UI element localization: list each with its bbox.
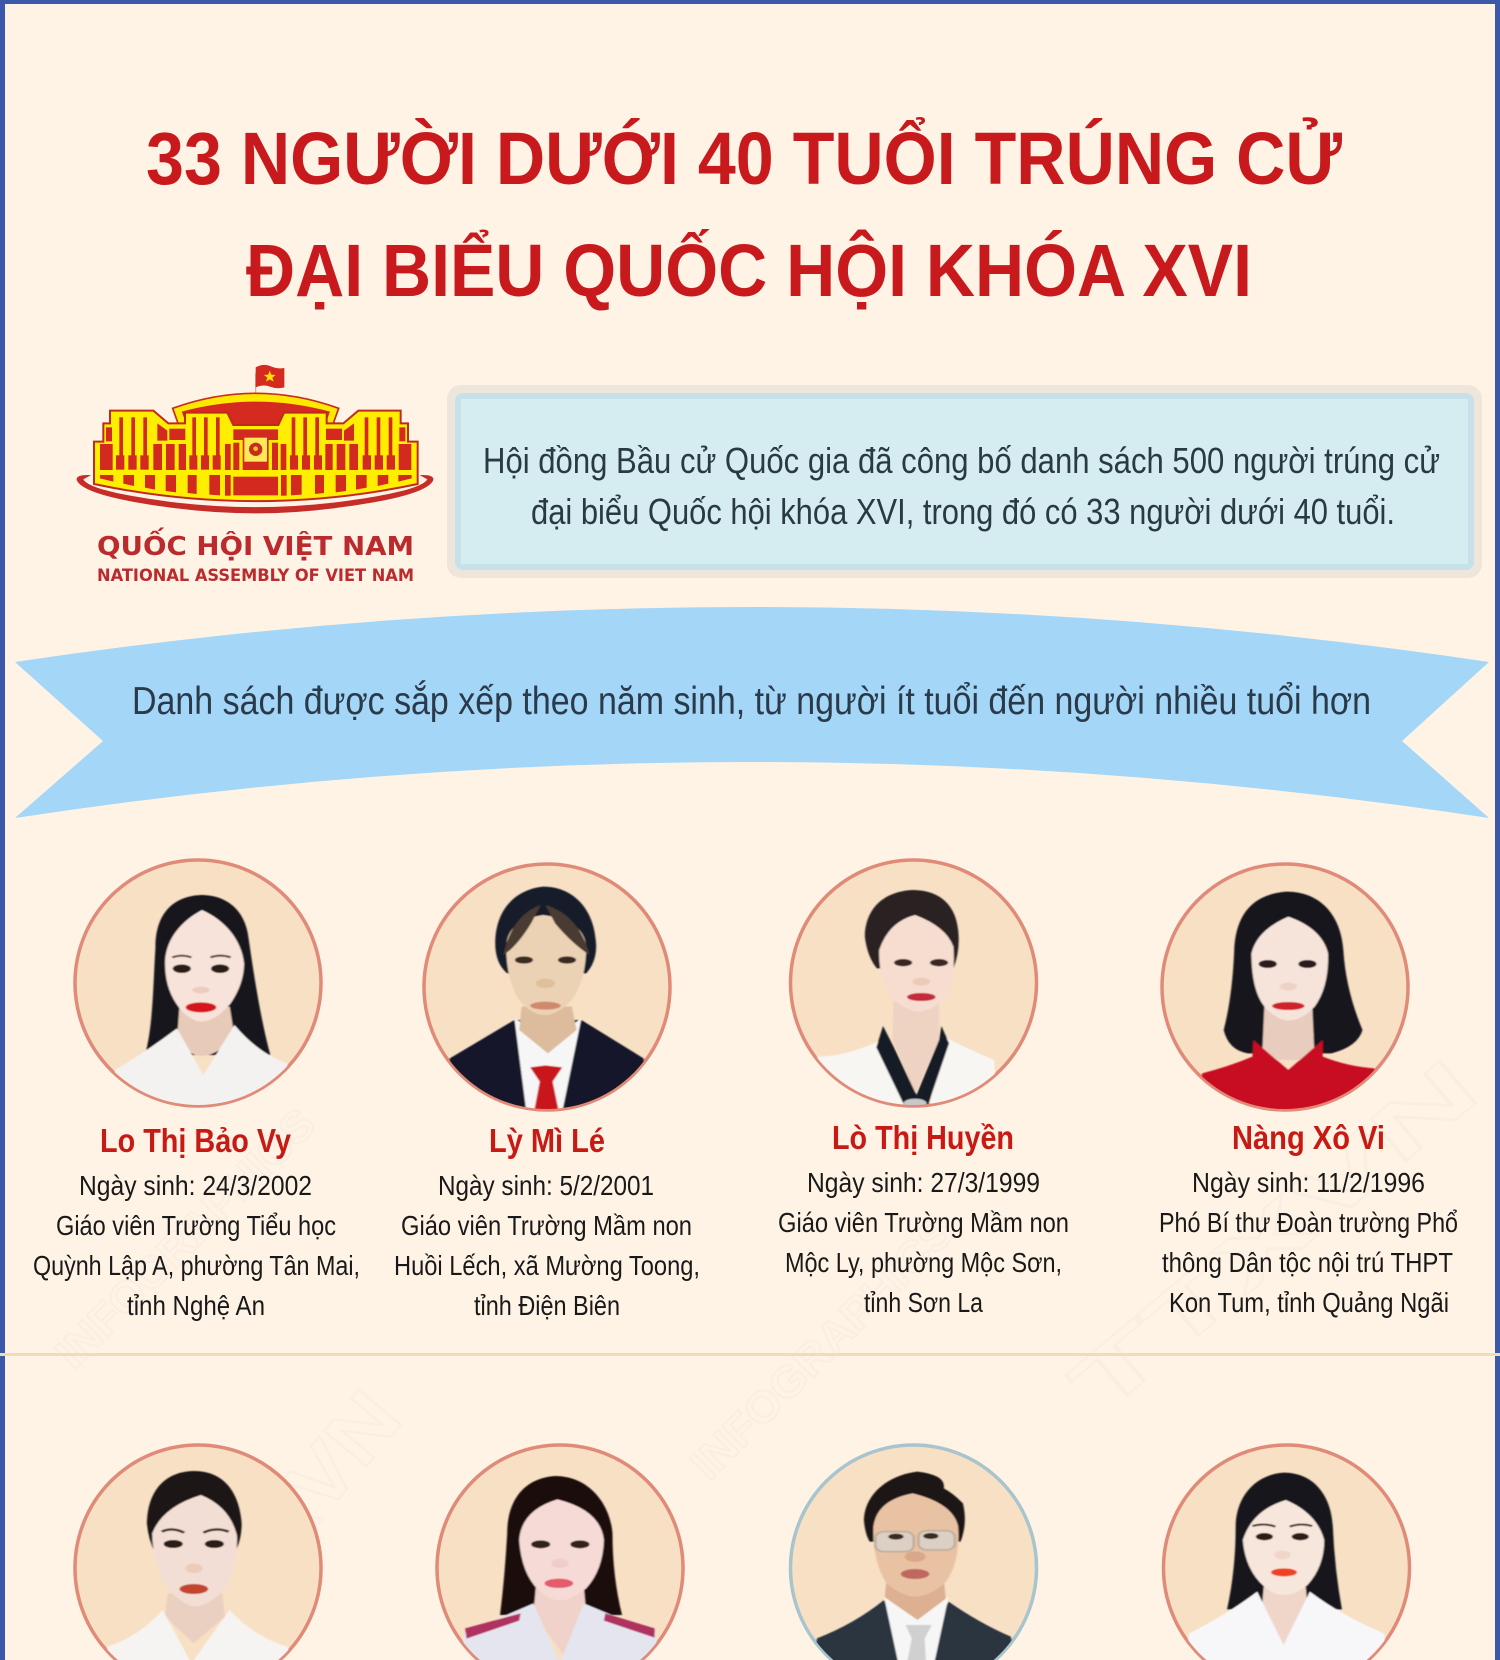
person text: Lo Thị Bảo Vy [33, 1122, 360, 1321]
person text: Lo Thị Bảo Vy: Giáo viên Trường Tiểu học [56, 1210, 336, 1241]
person text: Lò Thị Huyền [778, 1119, 1069, 1318]
person text: Lò Thị Huyền: Lò Thị Huyền [832, 1119, 1014, 1156]
person text: Lo Thị Bảo Vy: Ngày sinh: 24/3/2002 [79, 1170, 312, 1201]
portrait: person 6 [437, 1445, 683, 1660]
person text: Lỳ Mì Lé: Giáo viên Trường Mầm non [401, 1210, 692, 1241]
logo text [97, 526, 414, 586]
person text: Lo Thị Bảo Vy: Quỳnh Lập A, phường Tân Mai, [33, 1250, 360, 1281]
title [146, 117, 1343, 312]
portrait: Lỳ Mì Lé [424, 864, 670, 1117]
portrait: Lo Thị Bảo Vy [75, 860, 321, 1117]
person text: Nàng Xô Vi: thông Dân tộc nội trú THPT [1162, 1247, 1453, 1278]
person text: Lo Thị Bảo Vy: tỉnh Nghệ An [127, 1290, 265, 1321]
person text: Lỳ Mì Lé: Ngày sinh: 5/2/2001 [438, 1170, 654, 1201]
person text: Lỳ Mì Lé: Huồi Lếch, xã Mường Toong, [394, 1250, 700, 1281]
person text: Nàng Xô Vi [1159, 1119, 1458, 1318]
logo text: QUỐC HỘI VIỆT NAM [97, 526, 414, 562]
person text: Lỳ Mì Lé: tỉnh Điện Biên [474, 1290, 620, 1321]
watermarks: TTXVN [157, 1374, 418, 1660]
callout text [483, 440, 1440, 532]
watermarks [46, 1041, 1494, 1660]
person text: Lo Thị Bảo Vy: Lo Thị Bảo Vy [100, 1122, 292, 1159]
portrait: person 7 [790, 1445, 1036, 1660]
person text: Lò Thị Huyền: Giáo viên Trường Mầm non [778, 1207, 1069, 1238]
person text: Lò Thị Huyền: Mộc Ly, phường Mộc Sơn, [785, 1247, 1062, 1278]
portrait: person 5 [75, 1445, 321, 1660]
watermarks: INFOGRAPHICS [681, 1207, 964, 1489]
portrait: person 8 [1164, 1445, 1410, 1660]
person text: Lỳ Mì Lé: Lỳ Mì Lé [489, 1122, 605, 1159]
person text: Nàng Xô Vi: Kon Tum, tỉnh Quảng Ngãi [1169, 1287, 1449, 1318]
person text: Nàng Xô Vi: Ngày sinh: 11/2/1996 [1192, 1167, 1425, 1198]
watermarks: INFOGRAPHICS [46, 1099, 325, 1378]
person text: Lò Thị Huyền: tỉnh Sơn La [864, 1287, 983, 1318]
title: ĐẠI BIỂU QUỐC HỘI KHÓA XVI [246, 229, 1252, 312]
watermarks: TTXVN [1054, 1041, 1494, 1431]
panel: intro callout [447, 385, 1482, 578]
person text: Lỳ Mì Lé [394, 1122, 700, 1321]
person text: Nàng Xô Vi: Nàng Xô Vi [1232, 1119, 1385, 1156]
ribbon banner [15, 607, 1489, 818]
portrait: Nàng Xô Vi [1162, 864, 1408, 1117]
title: 33 NGƯỜI DƯỚI 40 TUỔI TRÚNG CỬ [146, 117, 1343, 200]
portrait: Lò Thị Huyền [790, 860, 1036, 1117]
logo: National Assembly of Viet Nam [77, 365, 433, 586]
icon: parliament building [77, 365, 433, 513]
logo text: NATIONAL ASSEMBLY OF VIET NAM [97, 566, 414, 586]
row divider [0, 1353, 1500, 1356]
person text: Lò Thị Huyền: Ngày sinh: 27/3/1999 [807, 1167, 1040, 1198]
